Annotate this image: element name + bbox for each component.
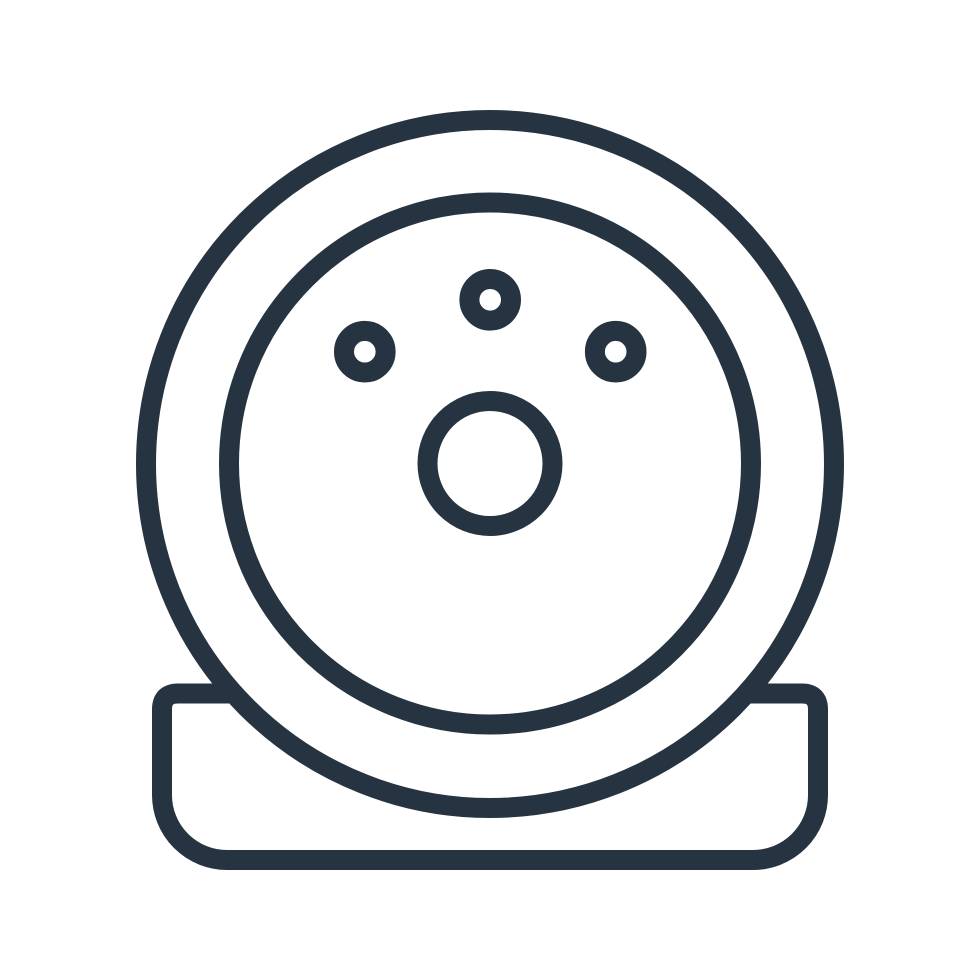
- icon: stand base: [162, 694, 818, 860]
- outer ring: [146, 120, 834, 808]
- inner ring: [229, 202, 751, 724]
- icon: left small dot: [344, 331, 386, 373]
- icon: center lens: [428, 401, 552, 526]
- icon: right small dot: [595, 331, 636, 373]
- icon: top small dot: [469, 279, 511, 321]
